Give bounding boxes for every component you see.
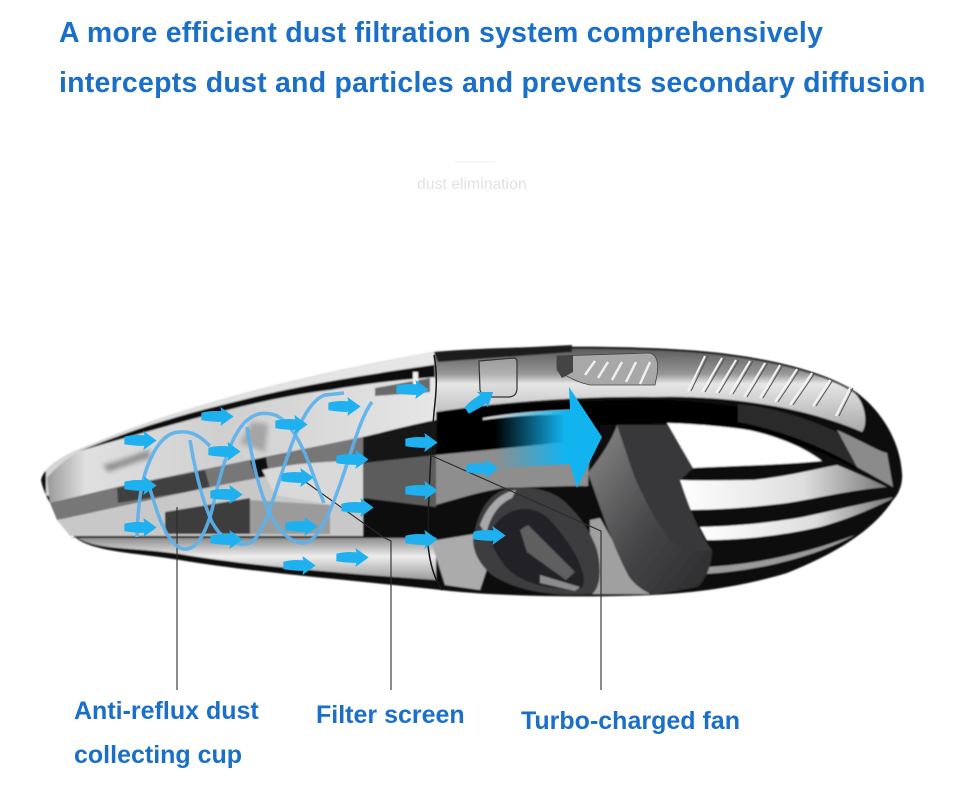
airflow spiral	[137, 393, 372, 549]
window smudge	[103, 450, 150, 472]
button outline	[479, 358, 517, 397]
body silhouette	[41, 347, 902, 596]
white grip window	[667, 423, 822, 468]
handle interior black	[437, 400, 860, 470]
faint caption: dust elimination	[417, 176, 527, 193]
faint caption rule	[455, 161, 495, 163]
dark band	[738, 404, 857, 467]
label: fan: Turbo-charged fan	[521, 707, 740, 735]
nozzle grey band	[50, 437, 363, 520]
collar shading	[434, 345, 572, 362]
right cap grey inset	[837, 430, 893, 487]
leader: filter screen	[300, 478, 391, 690]
nozzle top highlight	[46, 352, 440, 500]
vacuum body	[41, 345, 902, 596]
lower cylinder shell	[431, 530, 500, 590]
fan rim	[480, 490, 516, 535]
nozzle top black stripe	[80, 364, 440, 451]
label: dust cup: Anti-reflux dust	[74, 697, 259, 725]
shell behind strap	[590, 518, 650, 594]
fan housing	[473, 488, 600, 595]
airflow arrows	[124, 380, 506, 575]
light streak	[483, 410, 572, 420]
title	[59, 16, 926, 99]
label: filter screen: Filter screen	[316, 701, 465, 729]
label: dust cup	[74, 697, 259, 769]
leader: fan	[430, 455, 601, 690]
leader lines	[177, 455, 601, 690]
large airflow arrow	[470, 387, 602, 488]
nozzle lower light stripe	[57, 463, 363, 536]
grey stripe	[700, 497, 893, 540]
inner shadow arches	[240, 422, 268, 452]
collar seam	[428, 355, 442, 590]
nozzle window	[47, 377, 436, 503]
lower grey stripe	[705, 535, 855, 574]
lower cylinder black	[436, 486, 600, 538]
fan inner	[491, 509, 584, 589]
leader: dust cup	[176, 507, 178, 690]
title: A more efficient dust filtration system comprehensively	[59, 16, 823, 48]
strap	[588, 425, 712, 595]
label: dust cup: collecting cup	[74, 741, 242, 769]
title: intercepts dust and particles and prevents secondary diffusion	[59, 67, 926, 99]
dark latch	[375, 378, 430, 396]
lower cylinder grey	[436, 440, 590, 505]
strap fold	[617, 425, 712, 551]
collar stripes	[363, 420, 436, 463]
grip ribs	[688, 356, 850, 416]
handle top band	[434, 349, 865, 432]
switch slot	[557, 353, 658, 385]
nozzle bottom shell	[70, 537, 436, 580]
white lower stripe	[680, 465, 887, 510]
